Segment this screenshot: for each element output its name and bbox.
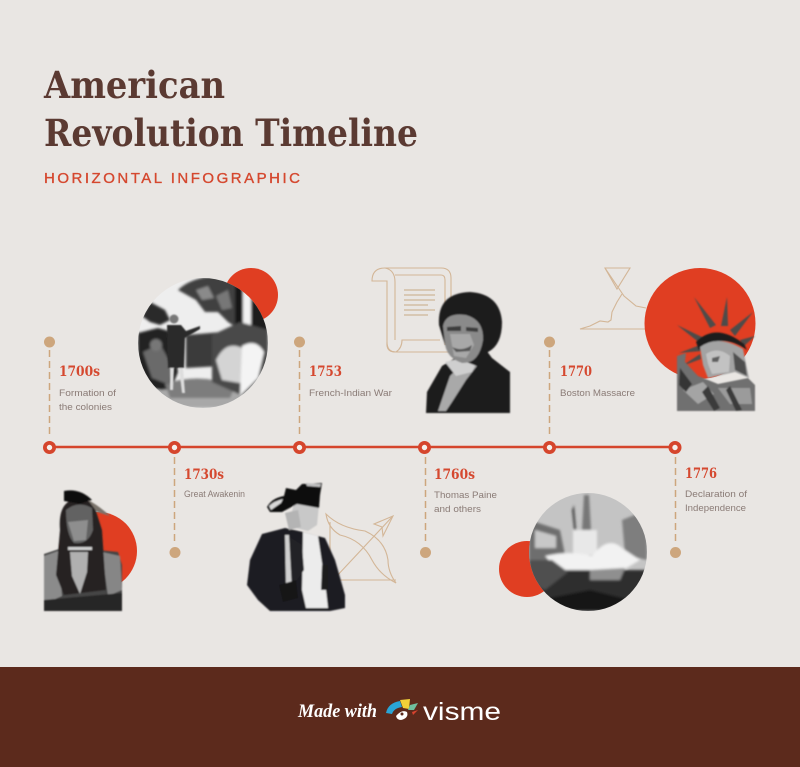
entry: 1776 [685,466,747,514]
entry: 1770: 1770 [560,364,592,380]
photo: Thomas Paine portrait [426,292,510,413]
icon: bow and arrow outline [326,514,396,583]
photo: Statue of Liberty with red circle [644,268,756,411]
entry: 1776: Declaration of [685,489,747,500]
entry: 1776: Independence [685,503,746,514]
entry: 1760s: Thomas Paine [434,490,497,501]
title: Revolution Timeline [44,111,418,155]
photo: orator in garden with red circle [138,268,278,408]
entry: 1700s: Formation of [59,388,116,399]
subtitle: HORIZONTAL INFOGRAPHIC [44,170,300,187]
entry: 1760s: and others [434,504,481,515]
footer band [0,667,800,767]
title: American [43,63,225,107]
entry: 1753: French-Indian War [309,388,392,399]
entry: 1776: 1776 [685,466,717,482]
icon: scroll outline [372,268,451,352]
made with label: Made with [297,701,377,722]
photo: Boston Massacre engraving with red circle [499,493,647,611]
entry: 1730s [184,467,245,500]
entry: 1730s: 1730s [184,467,224,483]
entry: 1700s: the colonies [59,402,112,413]
photo: Native American chief with red circle [44,490,137,611]
entry: 1730s: Great Awakenin [184,489,245,500]
entry: 1770: Boston Massacre [560,388,635,399]
visme wordmark: visme [423,698,501,726]
entry: 1700s [59,364,116,413]
connector dashes and end dots [44,336,681,558]
photo: colonial soldier in tricorn hat [247,483,345,611]
entry: 1700s: 1700s [59,364,100,380]
title [43,63,418,155]
entry: 1760s [434,467,497,515]
entry: 1770 [560,364,635,399]
entry: 1753: 1753 [309,364,342,380]
timeline axis [45,443,680,452]
icon: Virginia map outline [580,268,646,329]
icon: visme logo [386,699,418,720]
entry: 1753 [309,364,392,399]
entry: 1760s: 1760s [434,467,475,483]
